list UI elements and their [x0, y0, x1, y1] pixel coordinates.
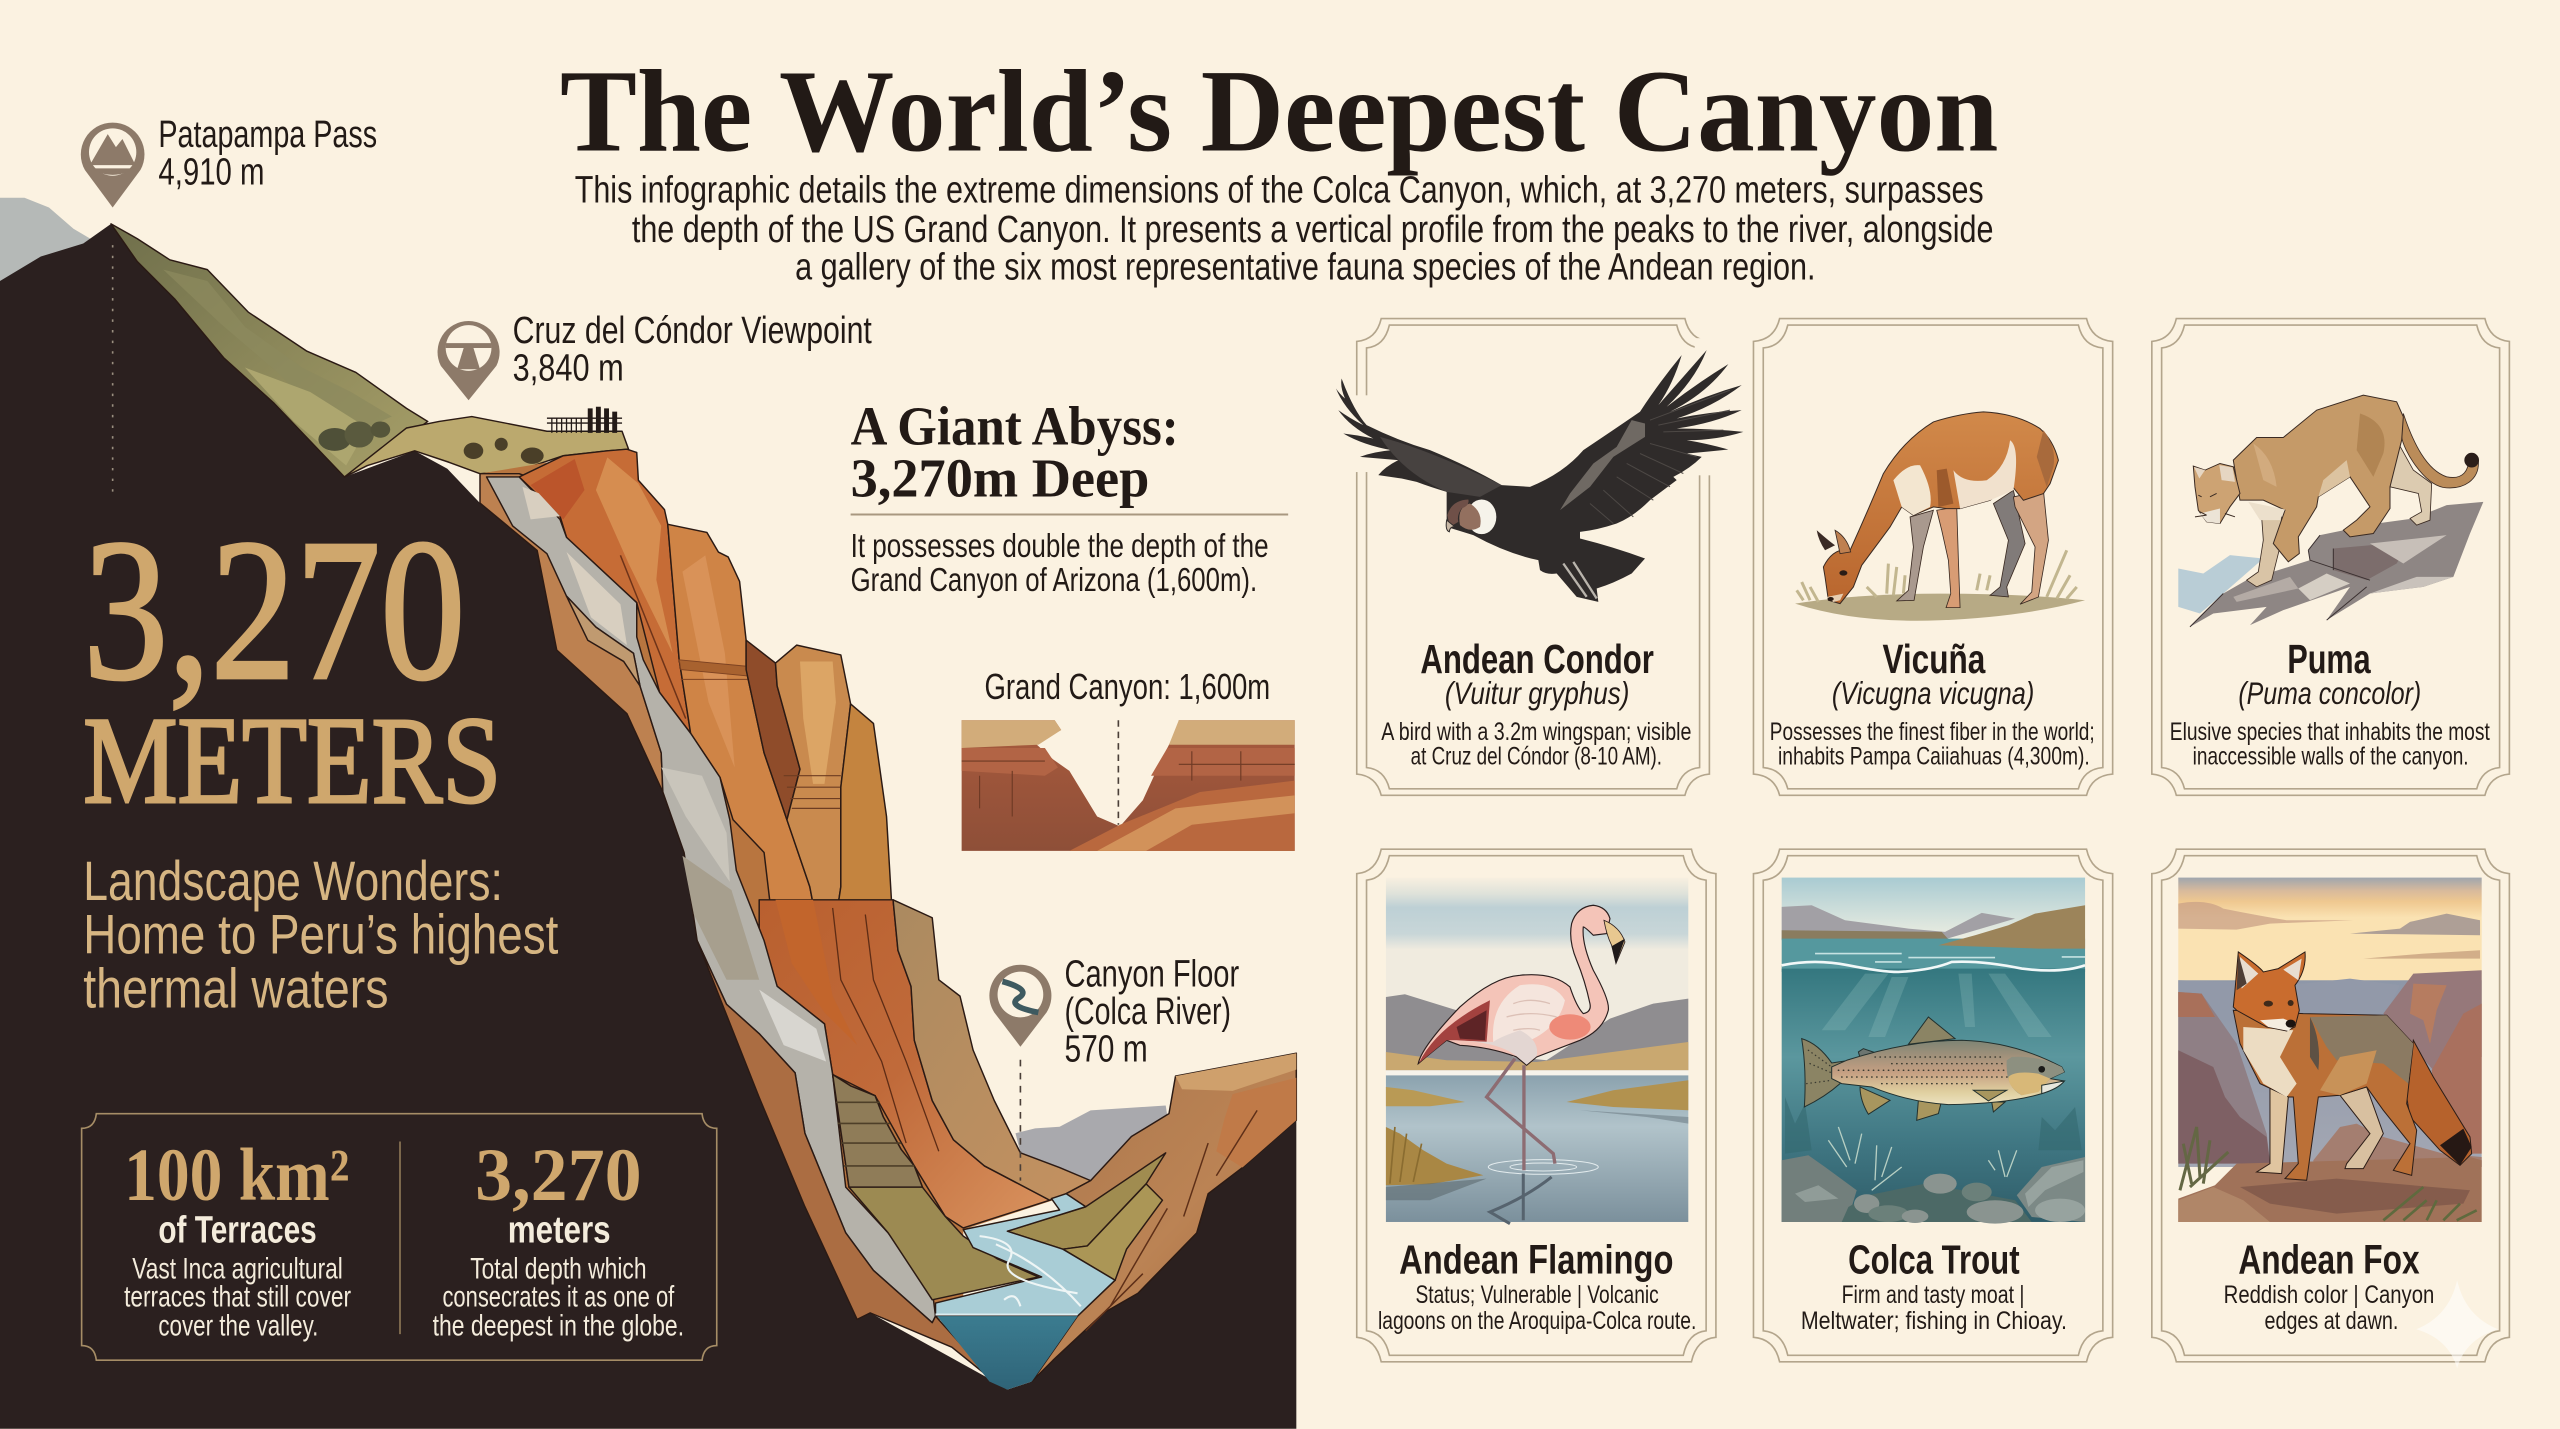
stats panel	[82, 1114, 717, 1360]
right canyon wall	[1007, 1053, 1296, 1381]
card: Andean Fox	[2152, 849, 2509, 1362]
second column	[668, 524, 824, 963]
intro text	[575, 169, 1993, 287]
intro text: This infographic details the extreme dimensions of the Colca Canyon, which, at 3,270 meters, surpasses	[575, 169, 1984, 211]
text: Andean Flamingo: Andean Flamingo	[1399, 1237, 1673, 1283]
icon: puma	[2178, 395, 2483, 627]
text: Andean Condor: Andean Condor	[1420, 636, 1654, 682]
colca river	[936, 1194, 1115, 1390]
label: Patapampa Pass	[158, 113, 377, 193]
card: Puma	[2152, 319, 2509, 795]
icon: flamingo	[1418, 905, 1625, 1170]
stat: terraces: Vast Inca agricultural	[132, 1253, 343, 1286]
abyss heading: 3,270m Deep	[851, 449, 1149, 510]
landscape wonders text: thermal waters	[83, 958, 389, 1020]
pin: Canyon Floor	[989, 965, 1051, 1047]
intro text: a gallery of the six most representative fauna species of the Andean region.	[795, 245, 1816, 287]
icon: vicuna	[1795, 412, 2085, 621]
text: Andean Fox: Reddish color | Canyon	[2224, 1281, 2434, 1309]
illustration: trout lake	[1782, 878, 2085, 1224]
text: Colca Trout: Firm and tasty moat |	[1842, 1281, 2024, 1309]
text: Colca Trout	[1801, 1237, 2067, 1335]
olive hillside	[111, 224, 428, 477]
pin: Patapampa Pass	[81, 123, 144, 208]
tan outer column	[893, 900, 1091, 1200]
text: Puma: (Puma concolor)	[2238, 676, 2421, 711]
stat: terraces: terraces that still cover	[124, 1280, 351, 1313]
third column	[776, 645, 851, 963]
abyss description: It possesses double the depth of the	[851, 528, 1269, 565]
abyss description: Grand Canyon of Arizona (1,600m).	[851, 562, 1257, 599]
landscape wonders text: Home to Peru’s highest	[83, 904, 559, 966]
floor dashed guide	[1019, 1060, 1021, 1181]
central orange column	[759, 900, 1050, 1228]
grand canyon inset illustration	[962, 720, 1295, 851]
abyss heading: A Giant Abyss:	[851, 396, 1179, 457]
text: Andean Fox: edges at dawn.	[2264, 1307, 2398, 1335]
text: Puma	[2170, 636, 2490, 770]
stat: terraces: 100 km²	[124, 1134, 349, 1217]
main cliff wall	[480, 449, 1091, 1381]
icon: sparkle watermark	[2416, 1280, 2498, 1368]
label: Patapampa Pass: 4,910 m	[158, 151, 264, 193]
card: Andean Condor	[1336, 319, 1743, 795]
illustration: fox at dawn	[2178, 878, 2482, 1222]
stat: depth: Total depth which	[470, 1253, 647, 1286]
icon: condor	[1336, 350, 1743, 602]
label: Cruz del Condor Viewpoint: 3,840 m	[513, 347, 624, 389]
label: Canyon Floor	[1064, 952, 1239, 1069]
abyss description	[851, 528, 1269, 599]
card: Vicuna	[1753, 319, 2113, 795]
landscape wonders text	[83, 850, 559, 1020]
stat: depth: meters	[508, 1209, 611, 1251]
stat: terraces	[124, 1134, 351, 1343]
text: Andean Flamingo: Status; Vulnerable | Volcanic	[1416, 1281, 1659, 1309]
text: Andean Condor: (Vuitur gryphus)	[1445, 676, 1629, 711]
text: Puma: inaccessible walls of the canyon.	[2193, 742, 2469, 770]
text: Vicuna: (Vicugna vicugna)	[1832, 676, 2034, 711]
stat: depth: the deepest in the globe.	[433, 1310, 684, 1343]
label: Canyon Floor: (Colca River)	[1064, 990, 1231, 1032]
distant grey mountain	[0, 198, 101, 286]
icon: fox	[2233, 952, 2472, 1180]
text: Andean Flamingo: lagoons on the Aroquipa-Colca route.	[1378, 1307, 1696, 1335]
illustration: flamingo lagoon	[1386, 878, 1688, 1224]
grand canyon label: Grand Canyon: 1,600m	[984, 666, 1270, 707]
big depth unit: METERS	[83, 691, 501, 829]
landscape wonders text: Landscape Wonders:	[83, 850, 503, 912]
label: Patapampa Pass: Patapampa Pass	[158, 113, 377, 155]
label: Canyon Floor: 570 m	[1064, 1027, 1148, 1069]
icon: trout	[1802, 1017, 2064, 1120]
text: Vicuna: Vicuña	[1882, 636, 1986, 682]
stat: depth	[433, 1134, 684, 1343]
canyon profile illustration	[0, 198, 1296, 1429]
card: Colca Trout	[1753, 849, 2113, 1362]
text: Vicuna: Possesses the finest fiber in the world;	[1770, 718, 2095, 746]
distant valley mountain	[1016, 1106, 1169, 1182]
text: Colca Trout: Meltwater; fishing in Chioay.	[1801, 1307, 2067, 1335]
text: Andean Condor: at Cruz del Cóndor (8-10 AM).	[1411, 742, 1662, 770]
text: Colca Trout: Colca Trout	[1848, 1237, 2020, 1283]
big depth number: 3,270	[83, 498, 465, 722]
card: Andean Flamingo	[1357, 849, 1716, 1362]
text: Andean Condor: A bird with a 3.2m wingspan; visible	[1381, 718, 1691, 746]
grey limestone band	[487, 477, 936, 1323]
stat: terraces: cover the valley.	[158, 1310, 318, 1343]
dark column	[746, 640, 800, 820]
abyss heading	[851, 396, 1179, 510]
text: Vicuna: inhabits Pampa Caiiahuas (4,300m).	[1778, 742, 2090, 770]
text: Andean Condor	[1381, 636, 1691, 770]
viewpoint plateau	[318, 417, 629, 477]
peak dotted guide	[112, 245, 114, 500]
stat: terraces: of Terraces	[158, 1209, 317, 1251]
text: Puma: Puma	[2287, 636, 2371, 682]
title: The World’s Deepest Canyon	[560, 46, 1998, 176]
label: Cruz del Condor Viewpoint	[513, 309, 872, 389]
lower left brown band	[697, 941, 994, 1381]
text: Andean Flamingo	[1378, 1237, 1696, 1335]
pin: Cruz del Condor	[438, 321, 500, 400]
intro text: the depth of the US Grand Canyon. It presents a vertical profile from the peaks to the river, alongside	[632, 208, 1993, 250]
dark rock mass	[0, 224, 1296, 1429]
tan terraced ledge	[833, 1074, 1038, 1300]
label: Canyon Floor: Canyon Floor	[1064, 952, 1239, 994]
text: Andean Fox: Andean Fox	[2238, 1237, 2420, 1283]
viewing platform with people	[547, 407, 622, 433]
text: Andean Fox	[2224, 1237, 2434, 1335]
text: Vicuna	[1770, 636, 2095, 770]
stat: depth: 3,270	[475, 1134, 642, 1217]
fourth column	[824, 704, 893, 963]
orange upper column	[519, 449, 691, 733]
stat: depth: consecrates it as one of	[442, 1280, 675, 1313]
label: Cruz del Condor Viewpoint: Cruz del Cóndor Viewpoint	[513, 309, 872, 351]
